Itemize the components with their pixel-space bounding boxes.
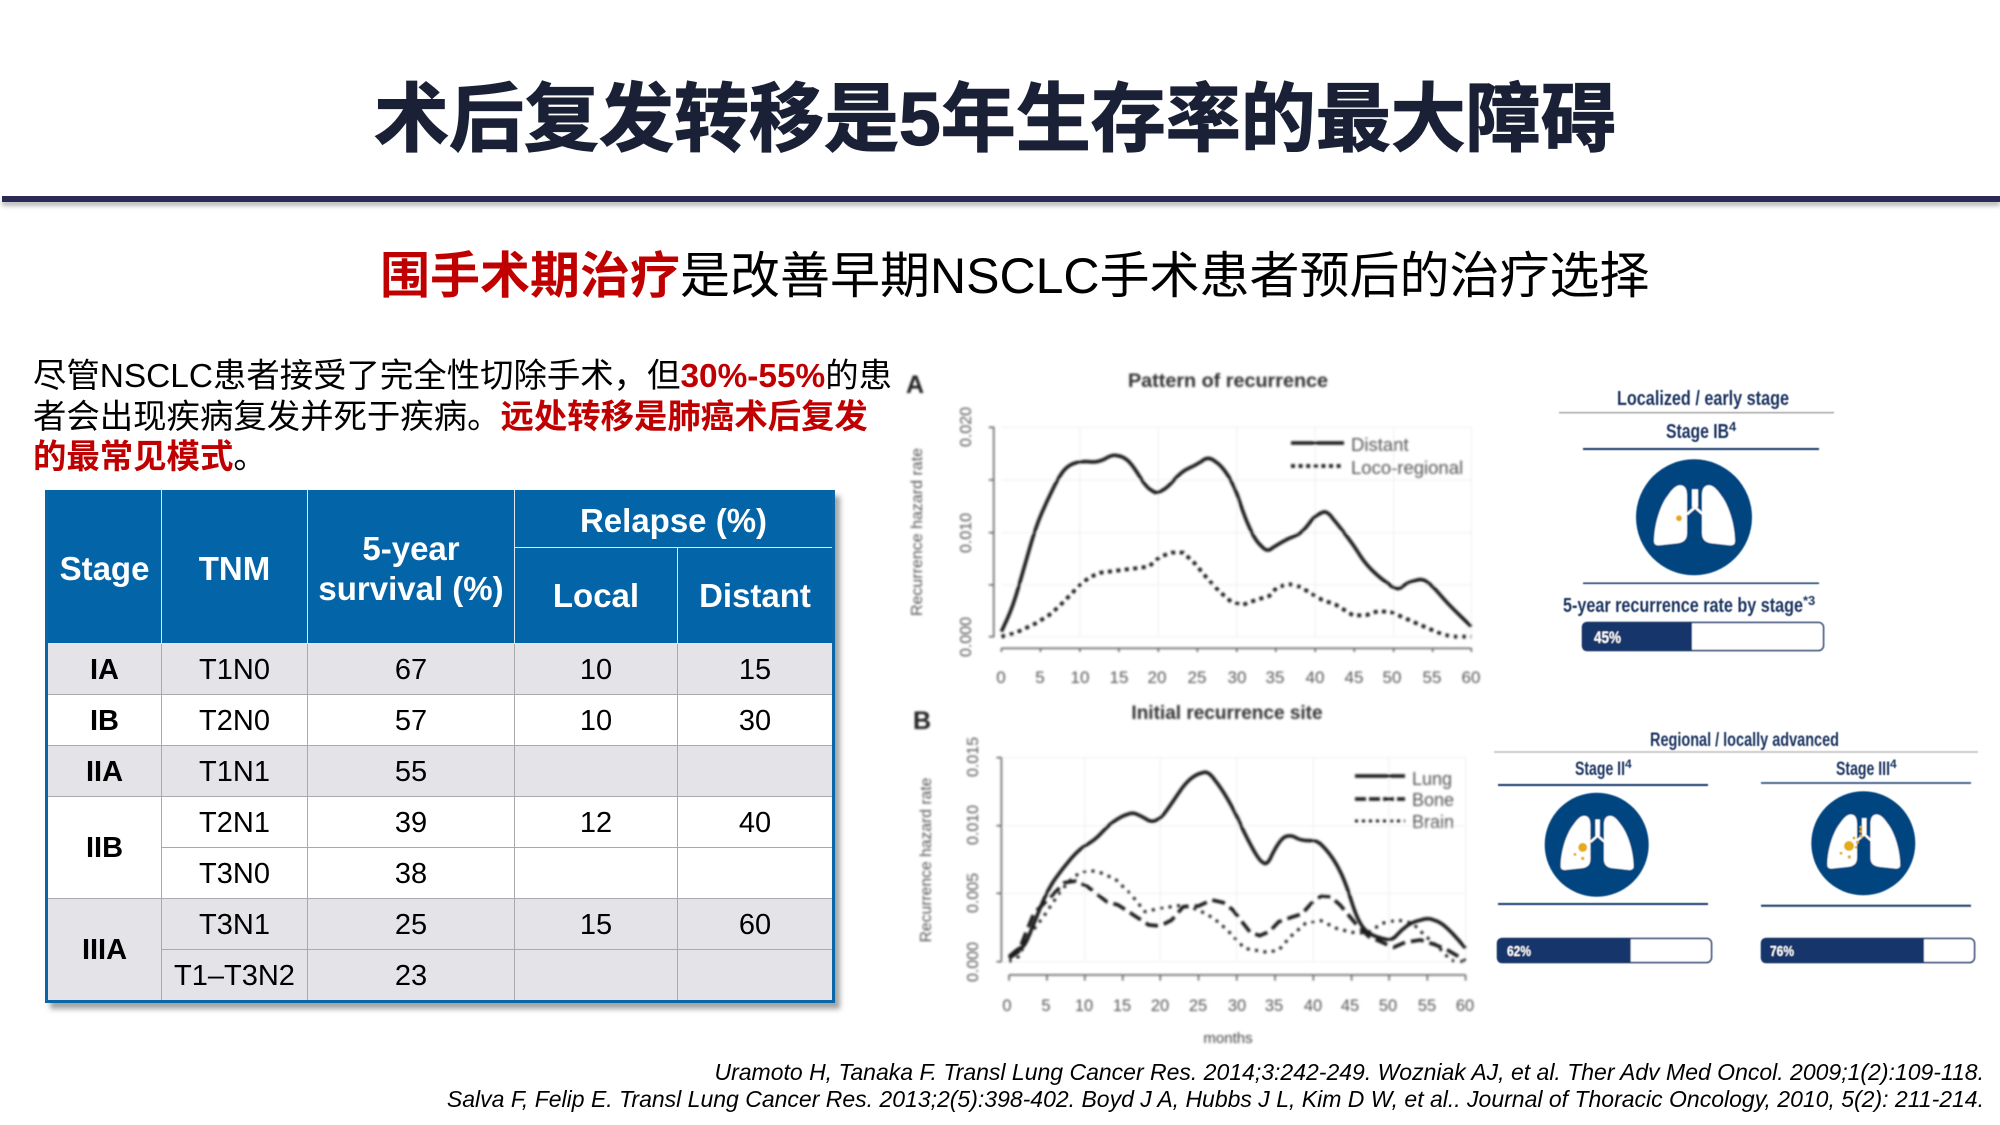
chart B x tick labels: 55 [1418,997,1436,1015]
intro paragraph: 者会出现疾病复发并死于疾病。远处转移是肺癌术后复发 [33,398,868,436]
staging table: T1N1 [199,756,270,788]
staging table: 57 [395,704,427,736]
chart B legend: Lung [1412,769,1452,789]
chart B legend: Brain [1412,812,1454,832]
chart A panel letter: A [906,371,924,399]
bar: stage II 62%: 62% [1507,943,1531,960]
chart B x tick labels: 60 [1456,997,1474,1015]
staging table: 5-year [362,530,460,567]
staging table: T3N0 [199,858,270,890]
panel: localized / early stage [1559,388,1834,651]
staging table: Stage [60,550,149,587]
stage II label: 4 [1625,757,1632,771]
references: Uramoto H, Tanaka F. Transl Lung Cancer Res. 2014;3:242-249. Wozniak AJ, et al. Ther Adv Med Oncol. 2009;1(2):109-118. [714,1059,1984,1085]
staging table: 39 [395,806,427,838]
chart A legend [1291,434,1463,478]
chart B x tick labels: 25 [1189,997,1207,1015]
chart A x tick labels: 15 [1110,668,1128,687]
stage IB label: Stage IB [1666,421,1729,443]
chart A title: Pattern of recurrence [1128,370,1328,392]
staging table: survival (%) [318,570,504,607]
staging table: Local [553,576,639,614]
chart B title: Initial recurrence site [1131,703,1323,724]
distant curve [1001,455,1471,632]
localized heading: Localized / early stage [1617,388,1789,410]
chart A: pattern of recurrence [906,370,1480,687]
staging table: 25 [395,908,427,940]
stage III label: Stage III [1836,759,1890,780]
chart B panel letter: B [913,707,931,735]
staging table: IIIA [82,934,127,966]
loco-regional curve [1001,553,1471,637]
brain curve [1009,871,1466,962]
staging table [45,490,835,1003]
chart A x tick labels: 45 [1345,668,1363,687]
recurrence rate heading: *3 [1803,593,1815,608]
chart B y tick labels: 0.000 [965,942,982,982]
bar: stage IB 45%: 45% [1594,629,1621,647]
chart B legend: Bone [1412,790,1454,810]
chart B x tick labels: 20 [1151,997,1169,1015]
chart B x tick labels: 10 [1075,997,1093,1015]
staging table: TNM [199,550,270,587]
chart A y tick labels [958,407,975,657]
lung curve [1009,772,1466,957]
subtitle: 围手术期治疗是改善早期NSCLC手术患者预后的治疗选择 [380,248,1649,304]
bar: stage II 62% [1497,938,1712,963]
stage II label: Stage II [1575,759,1625,780]
chart B x tick labels: 5 [1041,997,1051,1015]
icon: lungs stage IB [1636,459,1752,575]
staging table: 23 [395,960,427,992]
chart A legend: Loco-regional [1351,457,1463,478]
chart B x tick labels: 30 [1228,997,1246,1015]
chart B y tick labels: 0.010 [965,805,982,845]
regional heading: Regional / locally advanced [1650,730,1839,751]
chart A y tick labels: 0.020 [958,407,975,447]
chart A x tick labels: 40 [1306,668,1324,687]
bar: stage IB 45% [1582,622,1824,651]
references: Salva F, Felip E. Transl Lung Cancer Res. 2013;2(5):398-402. Boyd J A, Hubbs J L, Kim D W, et al.. Journal of Thoracic Oncology, 2010, 5(2): 211-214. [447,1086,1984,1112]
staging table: IIA [86,756,123,788]
chart A x tick labels: 5 [1035,668,1045,687]
intro paragraph [33,358,892,476]
title: 术后复发转移是5年生存率的最大障碍 [374,77,1616,161]
chart B legend [1355,769,1454,832]
recurrence rate heading: 5-year recurrence rate by stage [1563,595,1803,617]
chart A y axis label: Recurrence hazard rate [909,448,926,616]
chart A x tick labels: 20 [1148,668,1166,687]
staging table: 10 [580,654,612,686]
chart B x tick labels: 0 [1002,997,1012,1015]
chart A x tick labels: 35 [1266,668,1284,687]
staging table: T3N1 [199,908,270,940]
staging table: 30 [739,704,771,736]
chart B x tick labels: 15 [1113,997,1131,1015]
references [447,1059,1984,1112]
chart B y axis label: Recurrence hazard rate [918,777,935,942]
chart B y tick labels: 0.015 [965,737,982,777]
chart A x tick labels: 50 [1383,668,1401,687]
chart A x tick labels [996,668,1480,687]
staging table: T1–T3N2 [174,960,295,992]
chart A x tick labels: 55 [1423,668,1441,687]
staging table: 55 [395,756,427,788]
chart A x tick labels: 10 [1071,668,1089,687]
chart B y tick labels [965,737,982,982]
intro paragraph: 的最常见模式。 [33,439,267,476]
stage III label: 4 [1890,757,1897,771]
staging table: Relapse (%) [580,502,767,538]
panel: regional / locally advanced [1494,730,1978,963]
title rule [2,196,2000,202]
chart B y tick labels: 0.005 [965,873,982,913]
staging table: 15 [739,654,771,686]
chart B x axis label: months [1203,1030,1253,1047]
staging table: 10 [580,704,612,736]
staging table: 38 [395,858,427,890]
staging table: T2N1 [199,806,270,838]
chart B plot area [996,758,1466,981]
chart B: initial recurrence site [913,703,1474,1047]
chart A x tick labels: 0 [996,668,1006,687]
staging table: IB [90,704,119,736]
intro paragraph: 尽管NSCLC患者接受了完全性切除手术，但30%-55%的患 [33,358,892,395]
chart B x tick labels: 50 [1379,997,1397,1015]
staging table: 15 [580,908,612,940]
staging table: 12 [580,806,612,838]
staging table: Distant [699,576,811,614]
staging table: T1N0 [199,654,270,686]
icon: lungs stage III [1811,791,1915,895]
staging table: 40 [739,806,771,838]
chart B x tick labels: 35 [1265,997,1283,1015]
icon: lungs stage II [1545,793,1649,897]
staging table: IA [90,654,119,686]
staging table: 67 [395,654,427,686]
chart A x tick labels: 30 [1228,668,1246,687]
staging table: IIB [86,832,123,864]
staging table: T2N0 [199,704,270,736]
stage IB label: 4 [1729,419,1737,434]
chart A y tick labels: 0.000 [958,617,975,657]
chart A legend: Distant [1351,434,1409,455]
bar: stage III 76% [1761,938,1974,963]
chart B x tick labels: 45 [1341,997,1359,1015]
chart A x tick labels: 25 [1188,668,1206,687]
bone curve [1009,881,1466,961]
bar: stage III 76%: 76% [1770,943,1794,960]
chart B x tick labels: 40 [1304,997,1322,1015]
chart A y tick labels: 0.010 [958,513,975,553]
staging table: 60 [739,908,771,940]
chart A plot area [989,427,1471,652]
chart A x tick labels: 60 [1462,668,1480,687]
chart B x tick labels [1002,997,1474,1015]
